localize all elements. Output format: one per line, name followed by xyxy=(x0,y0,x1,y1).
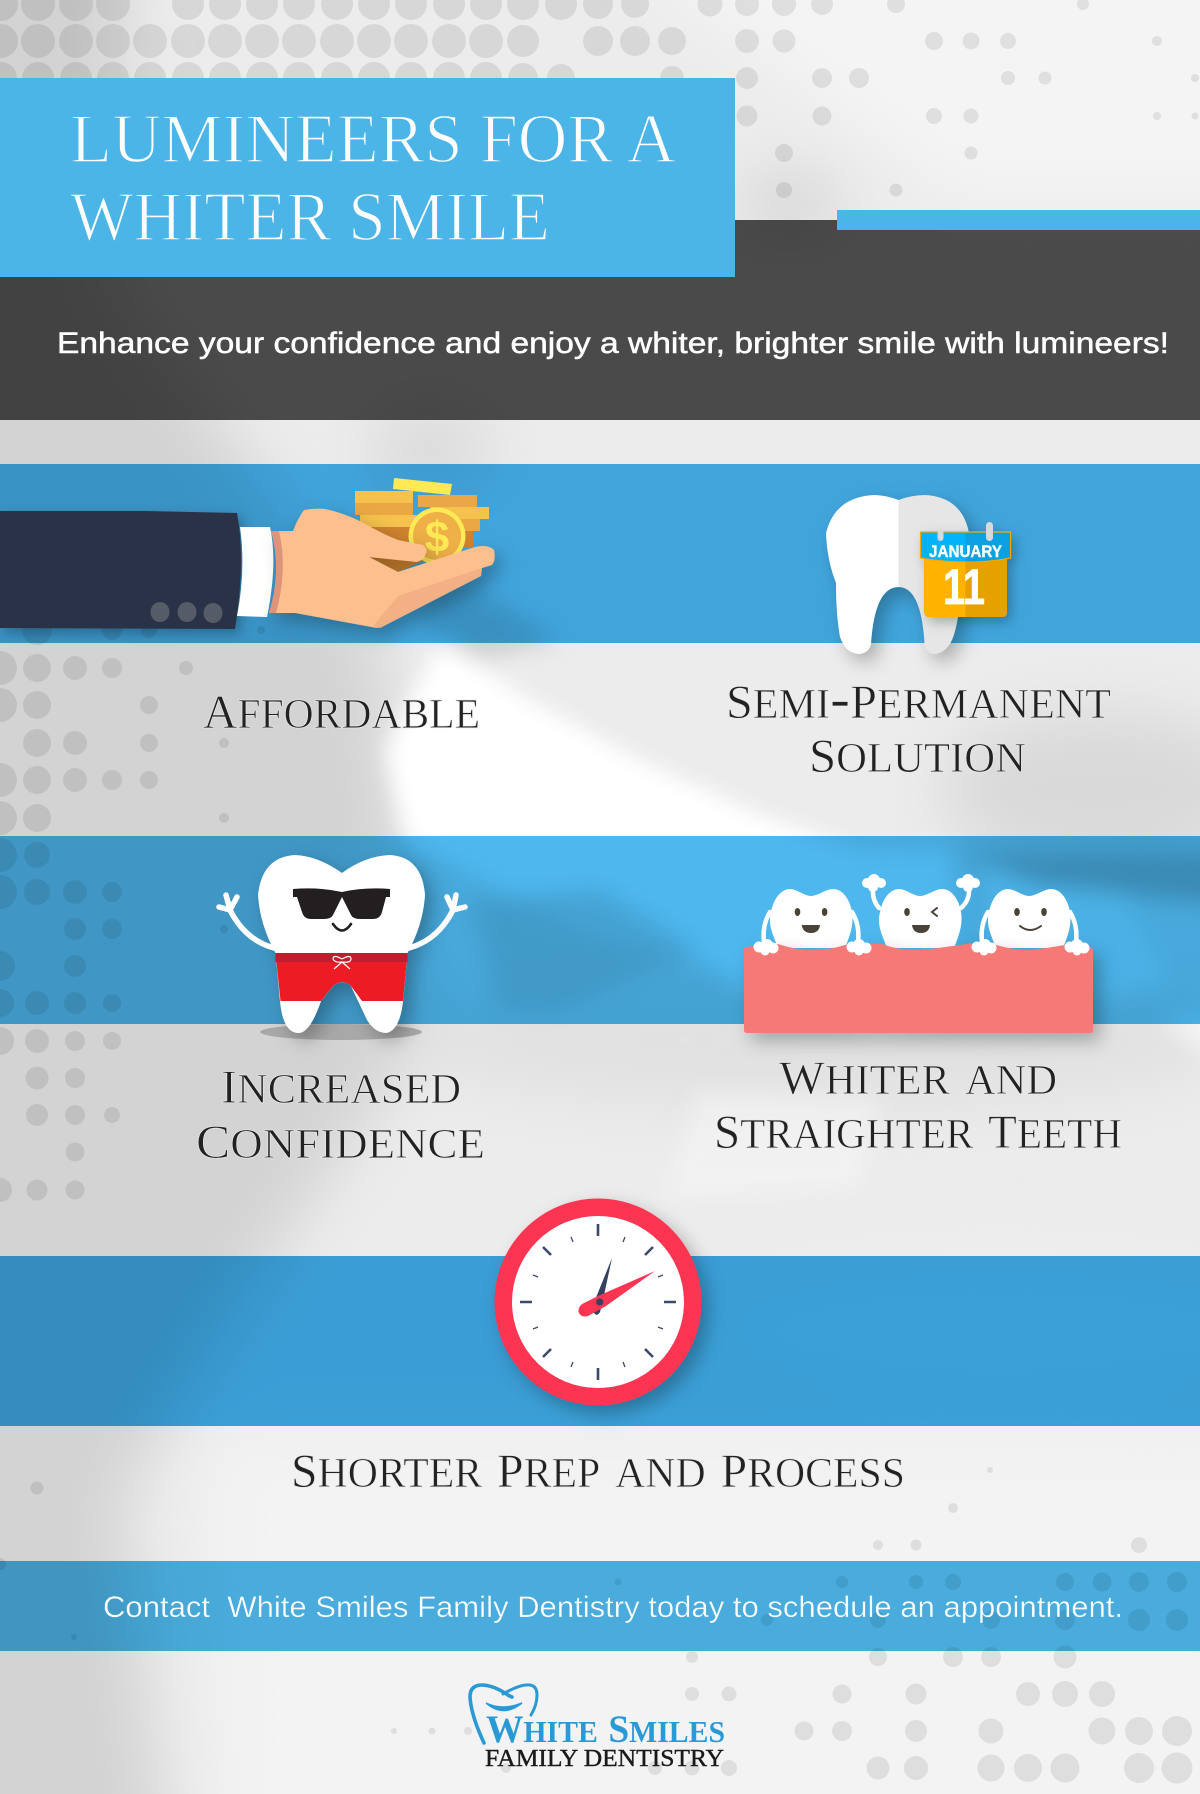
label: Semi-Permanent Solution: Solution xyxy=(809,719,1026,785)
tooth xyxy=(826,495,969,654)
title panel: LUMINEERS FOR A xyxy=(70,101,676,178)
label: Whiter and Straighter Teeth xyxy=(714,1041,1122,1161)
hour hand xyxy=(594,1258,612,1315)
icon: clock xyxy=(494,1198,702,1406)
icon: hand holding coins xyxy=(0,478,495,629)
blue band 1 xyxy=(0,464,1200,643)
subtitle: Enhance your confidence and enjoy a whiter, brighter smile with lumineers! xyxy=(57,327,1169,360)
smile xyxy=(333,924,351,930)
blue band 2 xyxy=(0,836,1200,1024)
contact text: Contact White Smiles Family Dentistry today to schedule an appointment. xyxy=(103,1591,1123,1624)
logo smile xyxy=(486,1703,522,1710)
shirt cuff xyxy=(237,527,273,617)
logo tooth outline xyxy=(470,1685,537,1743)
logo wordmark: White Smiles xyxy=(486,1703,725,1752)
label: Whiter and Straighter Teeth: Whiter and xyxy=(779,1041,1057,1107)
coins xyxy=(355,478,489,572)
arms and hands xyxy=(764,888,1076,942)
minute hand xyxy=(578,1271,655,1316)
sleeve buttons xyxy=(150,602,222,623)
icon: tooth with sunglasses and shorts xyxy=(219,855,465,1040)
label: Affordable: Affordable xyxy=(203,675,480,741)
label: Increased Confidence: Increased xyxy=(221,1050,461,1116)
icon: tooth with calendar xyxy=(826,495,1010,654)
title panel xyxy=(0,78,735,277)
tooth body xyxy=(258,855,425,1033)
label: Whiter and Straighter Teeth: Straighter Teeth xyxy=(714,1095,1122,1161)
clock face xyxy=(512,1216,684,1388)
blue accent bar xyxy=(837,210,1200,230)
blue band 3 xyxy=(0,1256,1200,1426)
calendar xyxy=(920,522,1010,617)
calendar: JANUARY xyxy=(929,542,1003,561)
drawstring bow xyxy=(333,956,351,969)
faces xyxy=(795,908,1047,933)
label: Increased Confidence xyxy=(196,1050,485,1171)
hand xyxy=(269,509,495,628)
arms xyxy=(219,895,465,948)
suit sleeve xyxy=(0,511,241,629)
contact band xyxy=(0,1561,1200,1651)
shorts xyxy=(276,953,408,1001)
label: Increased Confidence: Confidence xyxy=(196,1105,485,1171)
clock ticks xyxy=(520,1224,676,1380)
label: Semi-Permanent Solution: Semi-Permanent xyxy=(726,665,1111,731)
coins: $ xyxy=(425,513,449,562)
label: Semi-Permanent Solution xyxy=(726,665,1111,785)
title panel: WHITER SMILE xyxy=(70,179,550,256)
dark intro band xyxy=(0,220,1200,420)
logo: White Smiles Family Dentistry xyxy=(470,1685,725,1772)
sunglasses xyxy=(293,888,390,919)
calendar: 11 xyxy=(943,559,985,615)
clock pin xyxy=(596,1298,603,1306)
icon: three happy teeth on gum xyxy=(744,874,1093,1033)
teeth xyxy=(770,889,1071,948)
ground shadow xyxy=(260,1024,422,1040)
label: Shorter Prep and Process: Shorter Prep and Process xyxy=(291,1434,905,1500)
logo tagline: FAMILY DENTISTRY xyxy=(485,1746,724,1772)
gum xyxy=(744,943,1093,1033)
clock rim xyxy=(494,1198,702,1406)
